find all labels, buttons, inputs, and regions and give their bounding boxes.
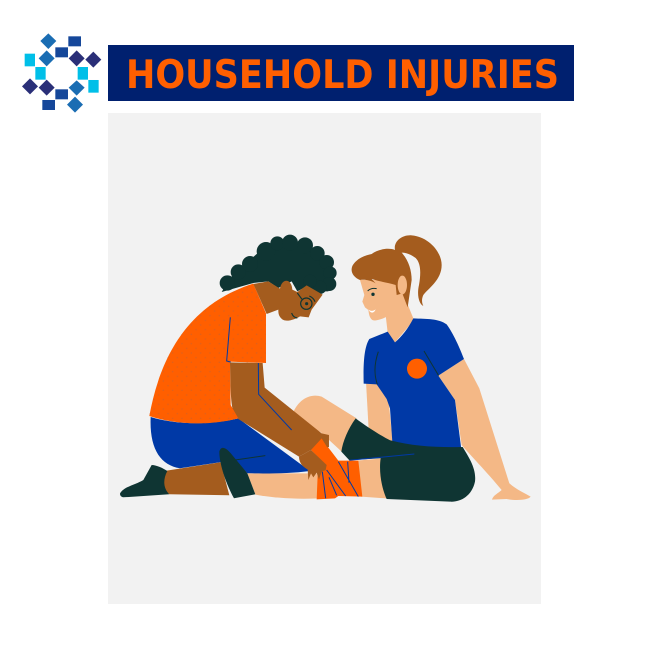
helper hair xyxy=(220,235,337,294)
patient leg and bandage xyxy=(247,396,390,499)
helper face and neck xyxy=(253,281,323,321)
bandage lines xyxy=(322,462,358,498)
patient shorts xyxy=(341,418,475,502)
icon: logo xyxy=(22,33,101,113)
helper hand xyxy=(299,450,327,480)
illustration: patient body xyxy=(364,304,531,500)
hand on bandage xyxy=(299,438,331,480)
title: HOUSEHOLD INJURIES xyxy=(126,53,559,98)
helper shin xyxy=(164,462,229,495)
helper shirt xyxy=(149,284,266,423)
bandage xyxy=(317,437,362,499)
patient far arm xyxy=(366,382,393,442)
patient head xyxy=(352,235,442,320)
helper shorts xyxy=(151,417,310,473)
patient knee and thigh xyxy=(292,396,357,452)
patient face xyxy=(360,280,409,320)
back foot xyxy=(120,465,169,497)
title banner xyxy=(108,45,574,101)
helper head xyxy=(220,235,337,321)
sleeve and arm lines xyxy=(227,317,292,430)
patient skin past bandage xyxy=(357,458,390,499)
shirt seam lines xyxy=(375,351,439,384)
panel: illustration background xyxy=(108,113,541,604)
shorts seam xyxy=(235,456,265,460)
helper arm xyxy=(230,362,329,457)
front foot xyxy=(219,448,255,498)
shirt badge xyxy=(407,359,427,379)
glasses and smile xyxy=(292,293,315,318)
bandage peak xyxy=(311,438,331,466)
patient lower leg xyxy=(247,473,318,499)
patient shirt xyxy=(364,318,464,452)
patient eye, brow, smile xyxy=(368,288,377,313)
illustration: helper xyxy=(120,284,329,498)
patient near arm xyxy=(438,359,531,500)
patient neck xyxy=(385,304,414,342)
shorts seam xyxy=(349,454,414,460)
patient ear xyxy=(398,276,407,294)
patient hair and ponytail xyxy=(352,235,442,307)
